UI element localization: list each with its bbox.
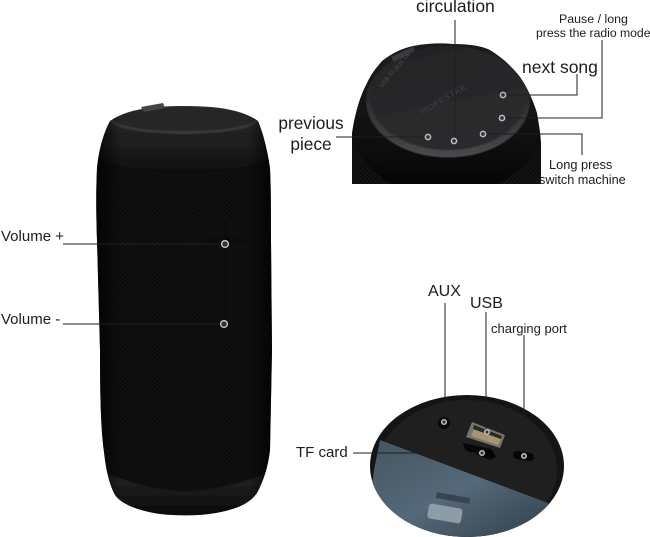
tab (391, 47, 415, 62)
speaker base (107, 472, 266, 516)
label: press the radio mode: press the radio mode (536, 26, 650, 40)
label: Volume -: Volume - (1, 311, 60, 328)
disk rim (366, 44, 530, 158)
label: USB: USB (470, 295, 503, 312)
USB port (466, 422, 505, 448)
volume button strip (223, 238, 229, 242)
blue reflecting panel (365, 440, 553, 537)
brand: HOPESTAR (420, 82, 469, 116)
aux jack (438, 417, 450, 429)
top speaker close-up (352, 43, 541, 184)
label: previous piece: previous (278, 113, 344, 133)
side shading (96, 100, 273, 520)
callout lines (63, 20, 602, 453)
label: previous piece: piece (290, 134, 332, 154)
outer rim (370, 395, 564, 537)
disk face (370, 46, 526, 150)
speaker: main body (90, 100, 280, 520)
TF slot (463, 443, 496, 460)
label: Pause / long: Pause / long (559, 12, 628, 26)
speaker top tab (141, 103, 165, 112)
blue panel slot (436, 492, 470, 504)
label: TF card: TF card (296, 444, 348, 461)
recess (377, 400, 557, 537)
callout markers (221, 92, 526, 458)
disk lettering: USB TF AUX DC5V (379, 45, 417, 89)
fabric corners (352, 138, 392, 184)
label: charging port: charging port (491, 321, 567, 336)
speaker top disk (110, 106, 258, 134)
bottom speaker close-up (370, 395, 564, 537)
label: next song: next song (522, 57, 598, 77)
label: switch machine: switch machine (539, 173, 626, 187)
label: Long press: Long press (549, 157, 612, 172)
charging port (513, 451, 534, 461)
speaker top cap (100, 106, 267, 158)
label: AUX: AUX (428, 283, 461, 300)
speaker fabric (90, 150, 280, 491)
label: Volume +: Volume + (1, 228, 64, 245)
